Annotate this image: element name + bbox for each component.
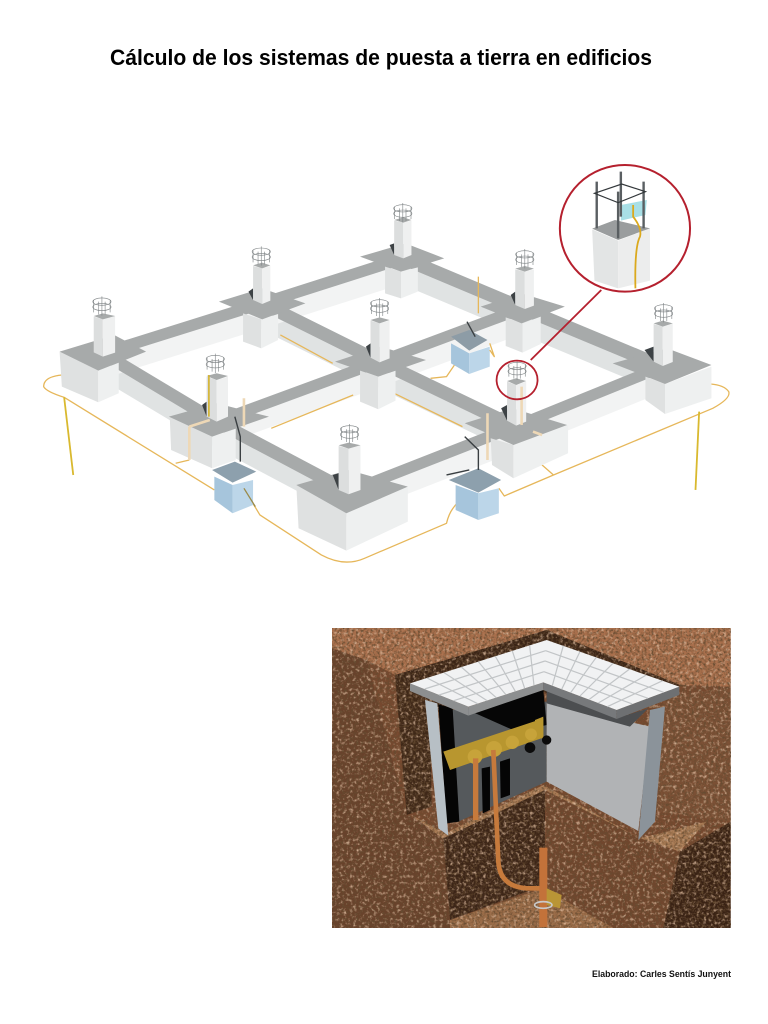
tie beam top faces (103, 251, 663, 499)
footing front-left (169, 403, 269, 468)
inspection box 1 (212, 417, 256, 513)
footing front (296, 470, 408, 551)
footing front-right (465, 408, 568, 478)
grating cover (410, 640, 679, 719)
brass busbar with terminals (443, 717, 551, 770)
footing centre (335, 347, 426, 409)
footing back (360, 243, 444, 298)
soil blocks (332, 628, 731, 928)
underground earthing pit illustration (332, 628, 731, 928)
tie beam side faces (103, 264, 663, 518)
footing right (613, 348, 711, 414)
copper conductors (476, 750, 543, 888)
earthing wire loop (44, 375, 729, 562)
wires inside grid cells (271, 277, 478, 428)
earthing rods (64, 397, 699, 490)
inspection box 2 (447, 437, 501, 520)
footing back-left (219, 288, 305, 348)
footing back-right (481, 293, 565, 353)
columns with rebar cages (93, 203, 673, 494)
footing left (60, 335, 146, 402)
soil texture (332, 628, 731, 928)
pale wires crossing the footings (189, 398, 542, 460)
concrete chamber walls (425, 688, 665, 840)
small highlight circle (497, 361, 538, 399)
copper earth rod with clamp (535, 848, 562, 927)
inspection box 3 (451, 322, 494, 374)
foundation grid illustration (43, 164, 730, 563)
magnified column detail (560, 165, 690, 292)
magnifier leader line (531, 290, 601, 360)
